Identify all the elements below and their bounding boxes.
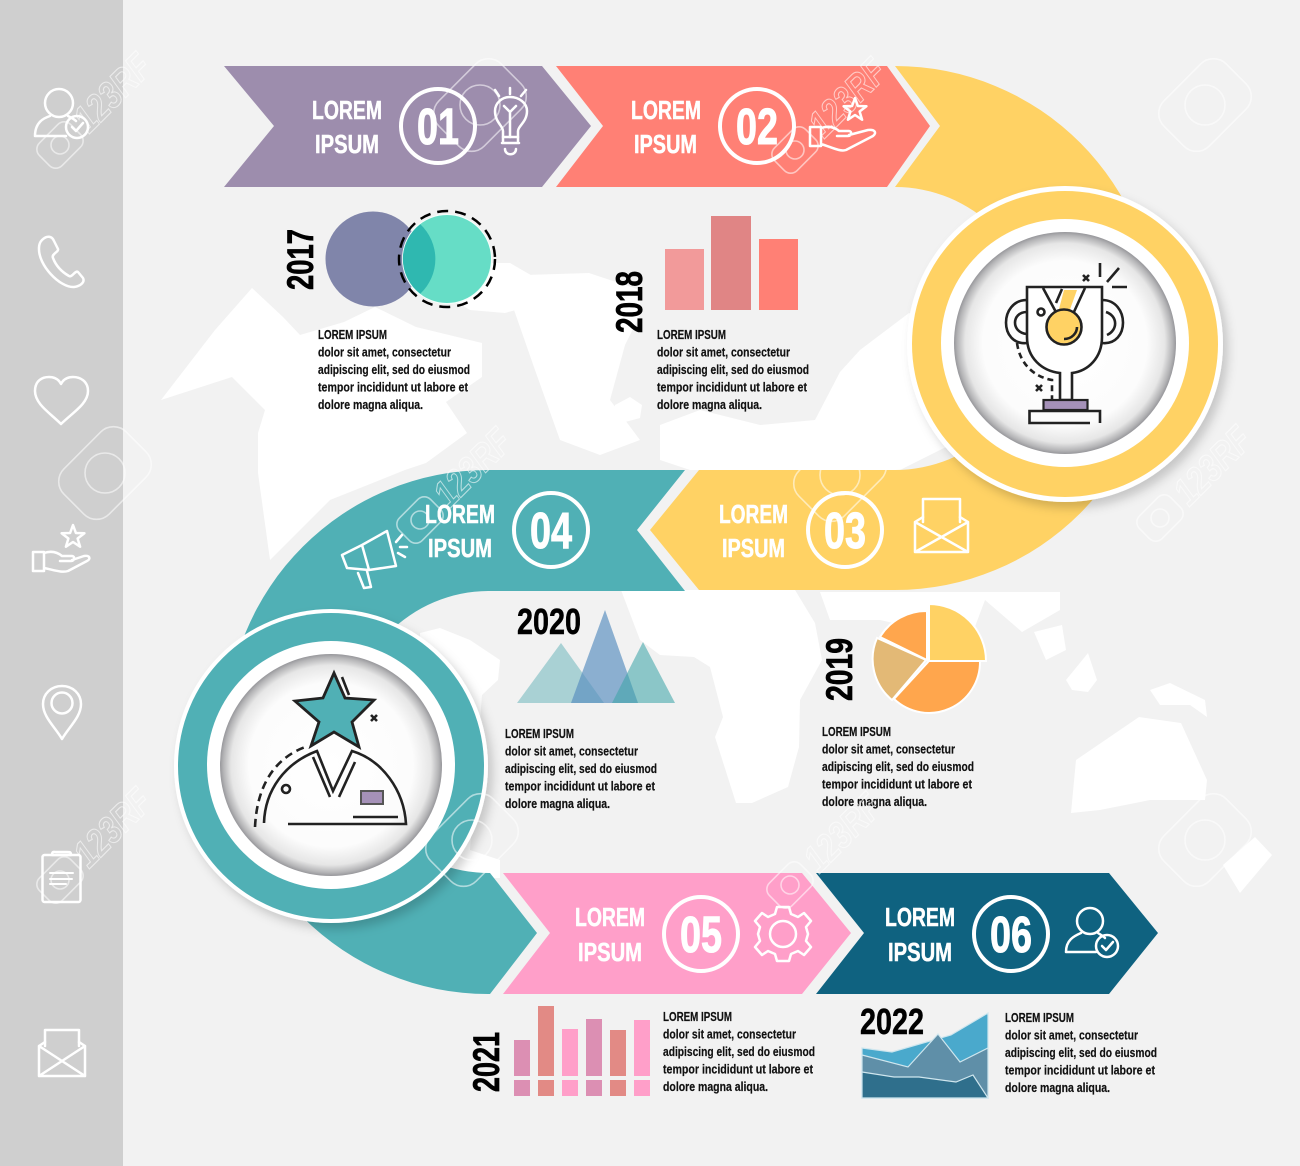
yellow curved step 03 band <box>650 66 1157 590</box>
text block: dolor sit amet, consectetur <box>1005 1028 1138 1042</box>
panel: 2022 area chart <box>860 1001 1157 1098</box>
text block <box>1005 1010 1157 1095</box>
label <box>425 499 495 563</box>
label: LOREM <box>425 499 495 529</box>
label: IPSUM <box>634 129 697 159</box>
teal curved step 04 band <box>226 470 685 994</box>
text block: adipiscing elit, sed do eiusmod <box>657 362 809 377</box>
year: 2022 <box>860 1001 924 1042</box>
curved band <box>650 66 1157 590</box>
text block <box>318 327 470 412</box>
text block: adipiscing elit, sed do eiusmod <box>318 362 470 377</box>
text block: tempor incididunt ut labore et <box>505 778 656 794</box>
label <box>885 902 955 967</box>
text block: tempor incididunt ut labore et <box>318 380 469 394</box>
outer white ring <box>174 609 488 923</box>
text block: tempor incididunt ut labore et <box>1005 1062 1156 1078</box>
venn diagram <box>326 211 495 307</box>
text block: LOREM IPSUM <box>1005 1010 1074 1025</box>
icon: phone <box>39 237 84 287</box>
text block: LOREM IPSUM <box>822 724 891 739</box>
panel: 2017 venn <box>280 211 495 412</box>
triangle chart <box>517 610 675 703</box>
text block <box>657 327 809 412</box>
shaded well <box>220 654 442 876</box>
year: 2020 <box>517 601 581 642</box>
text block: LOREM IPSUM <box>505 726 574 741</box>
step 01 chevron <box>224 66 591 187</box>
watermarks: 123RF <box>66 780 161 876</box>
icon: star and uniform <box>255 673 406 827</box>
text block: dolor sit amet, consectetur <box>822 742 955 756</box>
number badge: 04 <box>530 502 572 559</box>
number badge <box>664 897 738 971</box>
icon: clipboard <box>42 852 80 902</box>
text block: adipiscing elit, sed do eiusmod <box>663 1044 815 1059</box>
text block: dolore magna aliqua. <box>318 397 423 412</box>
text block: dolore magna aliqua. <box>822 794 927 809</box>
text block: LOREM IPSUM <box>318 327 387 342</box>
label <box>312 95 382 159</box>
step 02 chevron <box>556 66 930 187</box>
inner white ring <box>941 219 1189 467</box>
label: LOREM <box>631 95 701 125</box>
watermarks: 123RF <box>801 50 896 146</box>
watermarks: 123RF <box>66 45 161 141</box>
text block: dolore magna aliqua. <box>1005 1080 1110 1095</box>
sidebar panel <box>0 0 123 1166</box>
number badge: 03 <box>824 502 866 559</box>
label: IPSUM <box>428 533 492 563</box>
label: IPSUM <box>578 937 642 967</box>
icon: user check <box>1066 908 1118 957</box>
label: LOREM <box>312 95 382 125</box>
outer white ring <box>907 186 1223 502</box>
icon: hand with star <box>810 98 875 150</box>
text block <box>505 726 657 811</box>
text block <box>663 1009 815 1094</box>
inner white ring <box>207 641 455 889</box>
watermarks: 123RF <box>1166 418 1261 514</box>
label <box>719 499 788 563</box>
label: IPSUM <box>722 533 785 563</box>
icon: heart <box>35 377 88 424</box>
icon: open envelope <box>915 499 968 552</box>
label <box>575 902 645 967</box>
text block: adipiscing elit, sed do eiusmod <box>822 759 974 774</box>
label: LOREM <box>575 902 645 932</box>
text block: tempor incididunt ut labore et <box>657 380 808 394</box>
text block: tempor incididunt ut labore et <box>822 776 973 792</box>
text block: tempor incididunt ut labore et <box>663 1062 814 1076</box>
icon: light bulb <box>495 88 527 154</box>
text block: dolor sit amet, consectetur <box>318 344 451 360</box>
step 06 chevron <box>816 873 1158 994</box>
number badge: 02 <box>736 98 778 155</box>
year: 2018 <box>609 271 650 333</box>
number badge <box>974 897 1048 971</box>
year: 2021 <box>466 1032 507 1092</box>
label: LOREM <box>719 499 788 529</box>
text block: dolor sit amet, consectetur <box>505 744 638 758</box>
text block <box>822 724 974 809</box>
label <box>631 95 701 159</box>
teal ring medallion with star uniform <box>174 609 488 923</box>
number badge: 01 <box>417 98 459 155</box>
number badge <box>808 493 882 567</box>
label: IPSUM <box>888 937 952 967</box>
world map background <box>161 263 1272 893</box>
chevron shape <box>816 873 1158 994</box>
icon: envelope <box>39 1030 85 1076</box>
icon: location pin <box>43 686 81 739</box>
area chart <box>862 1013 988 1098</box>
text block: dolor sit amet, consectetur <box>663 1026 796 1042</box>
number badge <box>514 493 588 567</box>
icon: hand with star <box>33 525 89 572</box>
year: 2019 <box>819 638 860 701</box>
chevron shape <box>224 66 591 187</box>
chevron shape <box>503 873 851 994</box>
shaded well <box>954 232 1176 454</box>
text block: adipiscing elit, sed do eiusmod <box>1005 1045 1157 1060</box>
number badge: 06 <box>990 906 1032 963</box>
yellow ring medallion with trophy <box>907 186 1223 502</box>
number badge <box>720 89 794 163</box>
text block: dolor sit amet, consectetur <box>657 344 790 360</box>
panel: 2021 bar chart <box>466 1006 815 1096</box>
yellow ring <box>912 191 1218 497</box>
bar chart <box>514 1006 650 1096</box>
panel: 2018 bar chart <box>609 216 809 412</box>
text block: dolore magna aliqua. <box>663 1079 768 1094</box>
watermarks <box>30 45 1261 916</box>
sidebar icons <box>33 89 89 1076</box>
icon: trophy <box>1006 263 1127 423</box>
watermarks: 123RF <box>426 420 521 516</box>
text block: LOREM IPSUM <box>657 327 726 342</box>
step 05 chevron <box>503 873 851 994</box>
text block: dolore magna aliqua. <box>505 796 610 811</box>
year: 2017 <box>280 229 321 290</box>
icon: gear <box>755 907 811 961</box>
bar chart <box>665 216 798 310</box>
label: LOREM <box>885 902 955 932</box>
label: IPSUM <box>315 129 379 159</box>
text block: LOREM IPSUM <box>663 1009 732 1024</box>
text block: dolore magna aliqua. <box>657 397 762 412</box>
text block: adipiscing elit, sed do eiusmod <box>505 761 657 776</box>
pie chart <box>873 604 986 713</box>
panel: 2020 triangles <box>505 601 675 811</box>
icon: megaphone <box>342 531 407 588</box>
teal ring <box>178 613 484 919</box>
number badge: 05 <box>680 906 722 963</box>
watermarks: 123RF <box>796 785 891 881</box>
icon: user check <box>35 89 88 138</box>
panel: 2019 pie chart <box>819 604 986 809</box>
curved band <box>226 470 685 994</box>
chevron shape <box>556 66 930 187</box>
number badge <box>401 89 475 163</box>
